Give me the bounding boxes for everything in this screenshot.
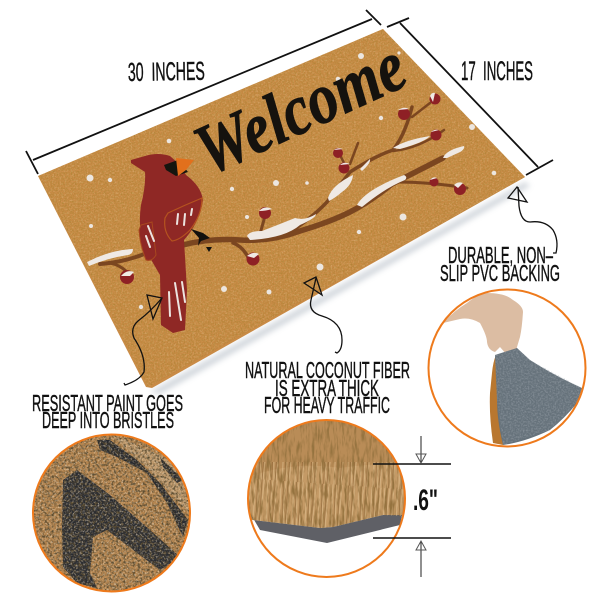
circle: painted bristles close-up bbox=[30, 430, 195, 595]
label: fiber: IS EXTRA THICK bbox=[275, 375, 379, 401]
label: paint: RESISTANT PAINT GOES bbox=[32, 390, 183, 416]
label: .6 inch: .6" bbox=[413, 484, 438, 517]
arrow: coconut fiber bbox=[304, 277, 342, 353]
snow on branches bbox=[87, 136, 464, 266]
circle: hand lifting backing bbox=[428, 290, 586, 450]
arrow: backing bbox=[508, 187, 557, 253]
cardinal bbox=[131, 154, 212, 333]
door mat bbox=[30, 20, 530, 395]
dimension line: 17 inches bbox=[387, 18, 553, 175]
label: fiber: NATURAL COCONUT FIBER bbox=[245, 357, 410, 383]
welcome lettering: Welcome bbox=[182, 25, 418, 191]
label: fiber: FOR HEAVY TRAFFIC bbox=[264, 392, 390, 418]
branches bbox=[100, 103, 467, 272]
label: 30 inches: 30 INCHES bbox=[128, 56, 205, 87]
arrow: paint bbox=[124, 295, 162, 385]
thickness marker bbox=[373, 436, 451, 577]
dimension line: 30 inches bbox=[26, 10, 381, 174]
label: paint bbox=[32, 390, 183, 433]
snowflakes bbox=[86, 51, 496, 309]
berries bbox=[120, 93, 466, 284]
label: backing bbox=[440, 242, 560, 286]
label: fiber bbox=[245, 357, 410, 418]
circle: fiber thickness close-up bbox=[247, 419, 406, 578]
label: paint: DEEP INTO BRISTLES bbox=[42, 407, 174, 433]
